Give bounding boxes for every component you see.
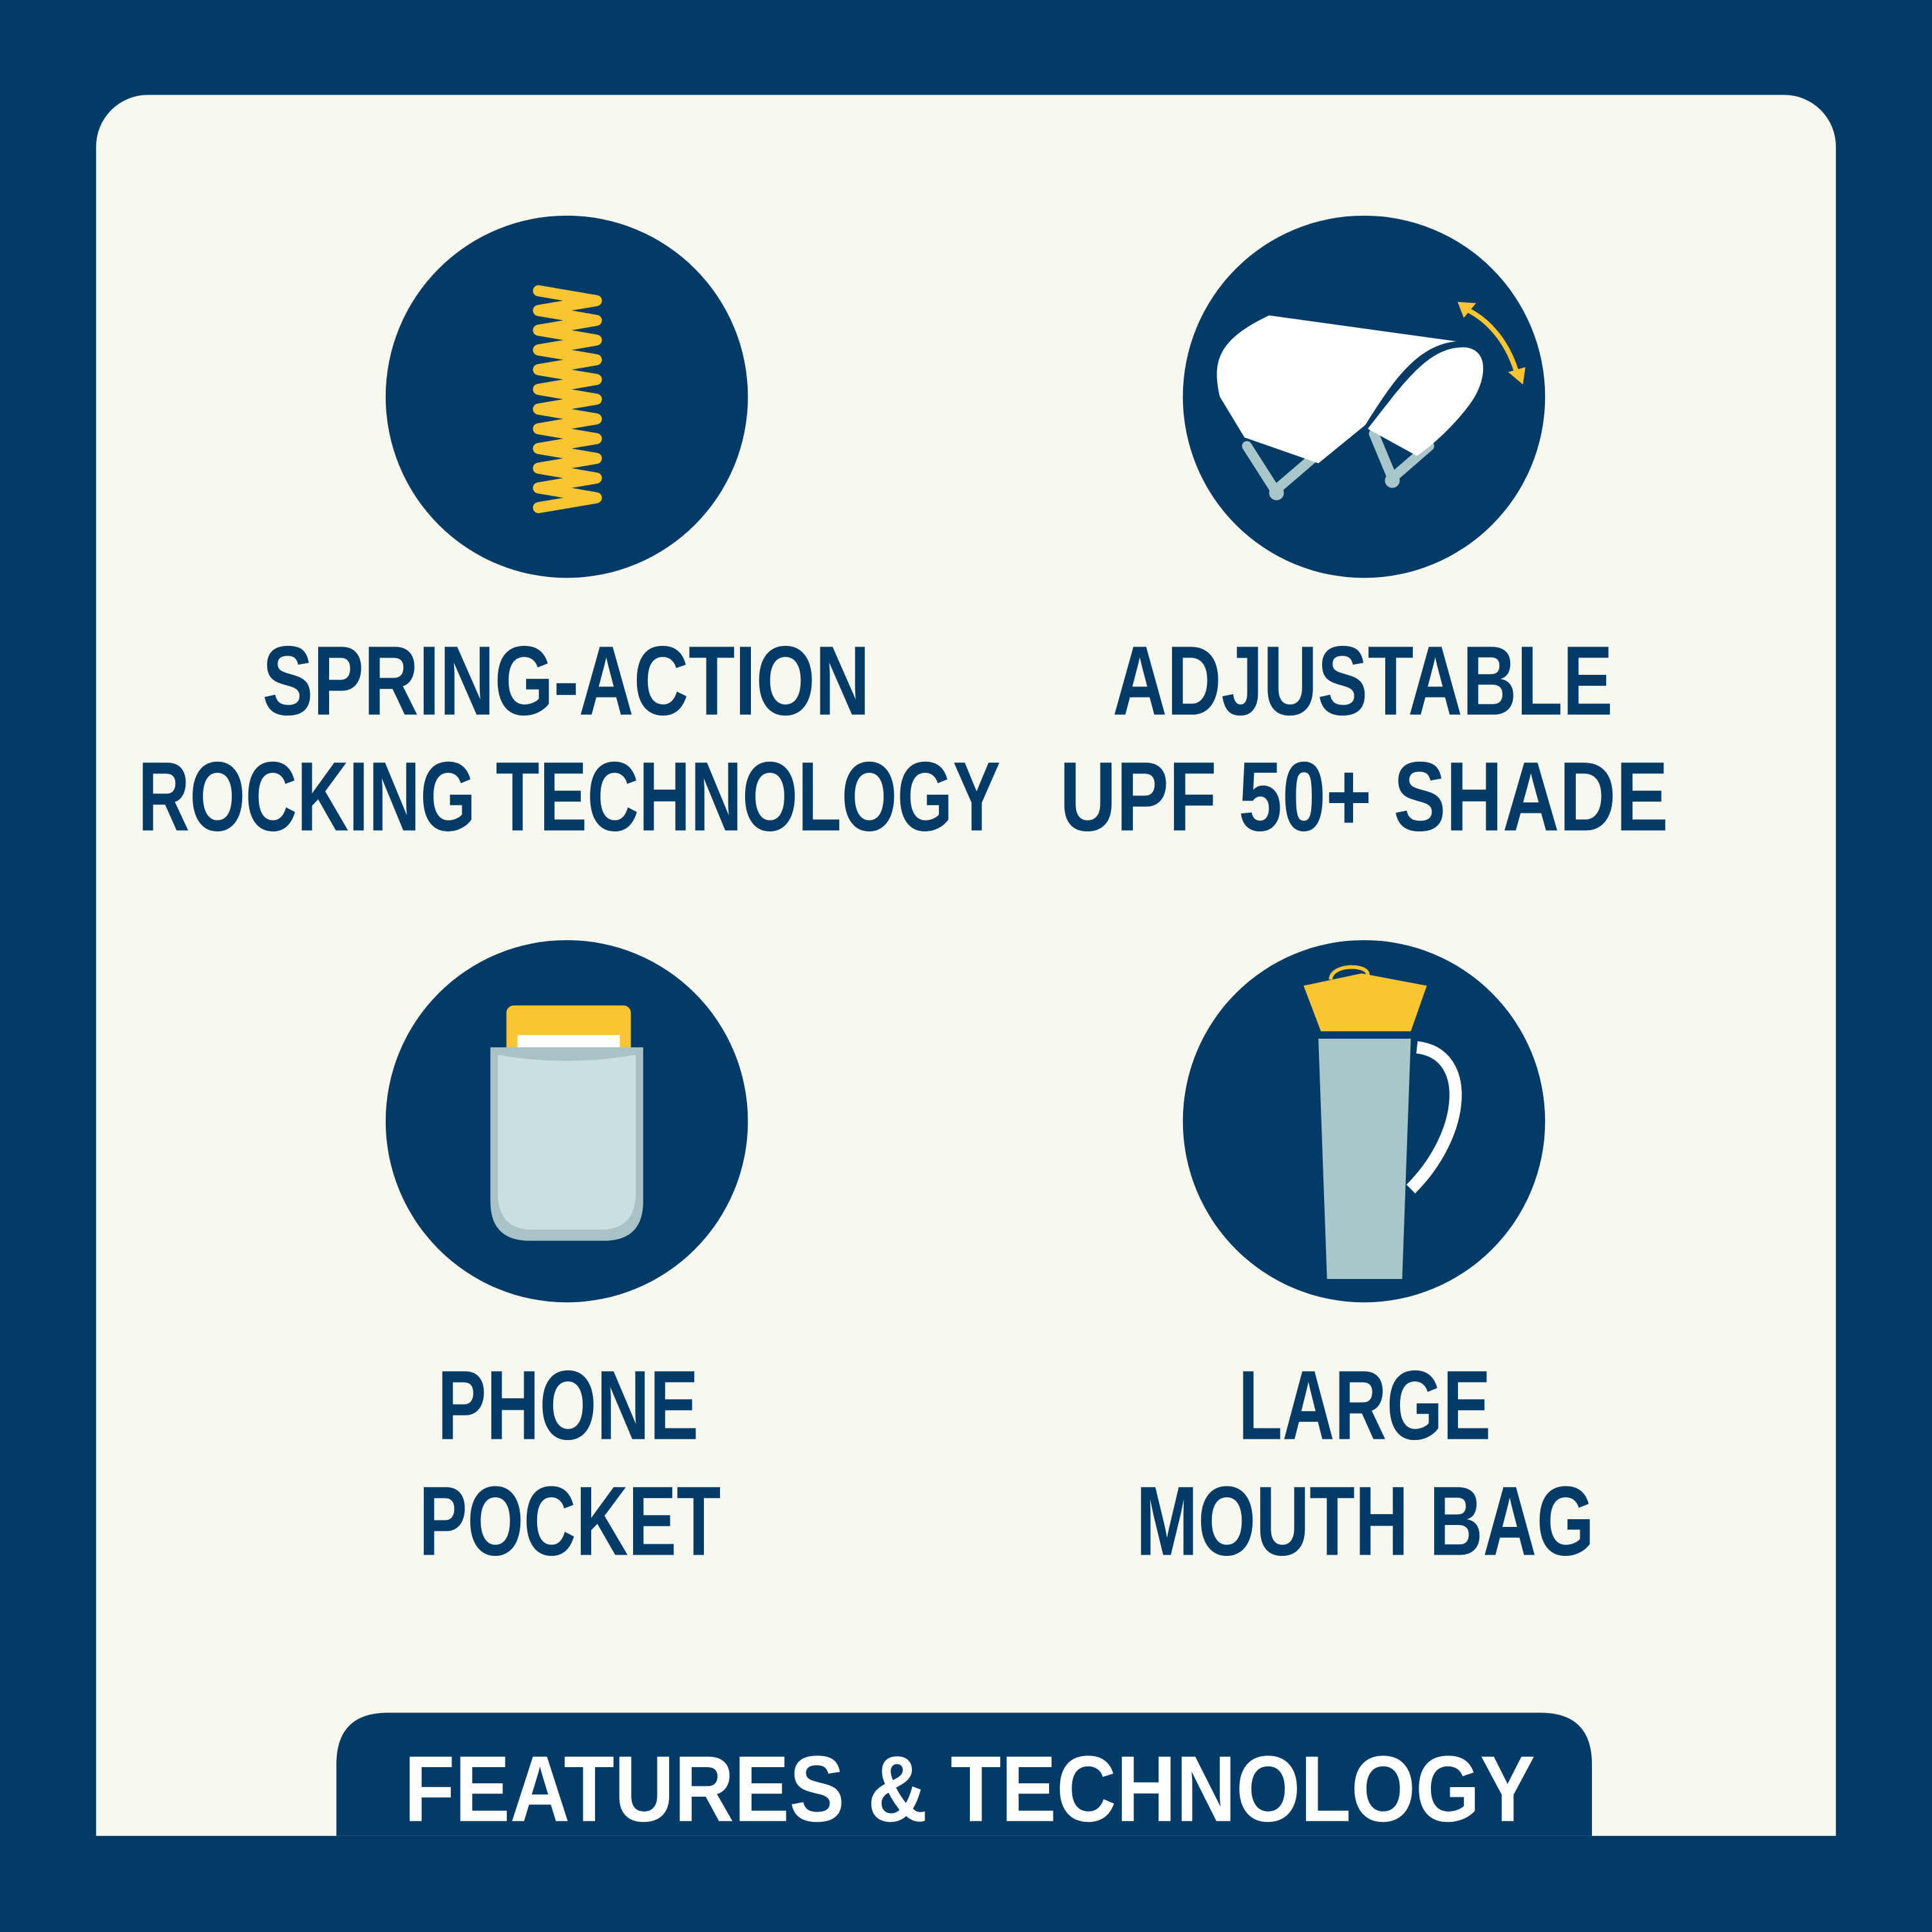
text: spring-action label	[138, 626, 1001, 852]
text: shade label	[1059, 626, 1669, 852]
icon: large mouth bag	[1183, 940, 1545, 1302]
icon: shade chair	[1183, 216, 1545, 578]
text: spring-action label: SPRING-ACTION	[263, 626, 870, 736]
text: shade label: UPF 50+ SHADE	[1059, 742, 1669, 852]
icon: phone pocket	[386, 940, 748, 1302]
text: phone pocket label: POCKET	[419, 1466, 721, 1577]
text: phone pocket label: PHONE	[437, 1350, 699, 1461]
text: bag label: LARGE	[1238, 1350, 1491, 1461]
bottom bar	[0, 1836, 1932, 1932]
text: bag label	[1136, 1350, 1595, 1577]
text: spring-action label: ROCKING TECHNOLOGY	[138, 742, 1001, 852]
text: shade label: ADJUSTABLE	[1113, 626, 1613, 736]
icon: spring	[386, 216, 748, 578]
text: phone pocket label	[419, 1350, 721, 1577]
title tab: FEATURES & TECHNOLOGY	[404, 1736, 1535, 1841]
text: bag label: MOUTH BAG	[1136, 1466, 1595, 1577]
